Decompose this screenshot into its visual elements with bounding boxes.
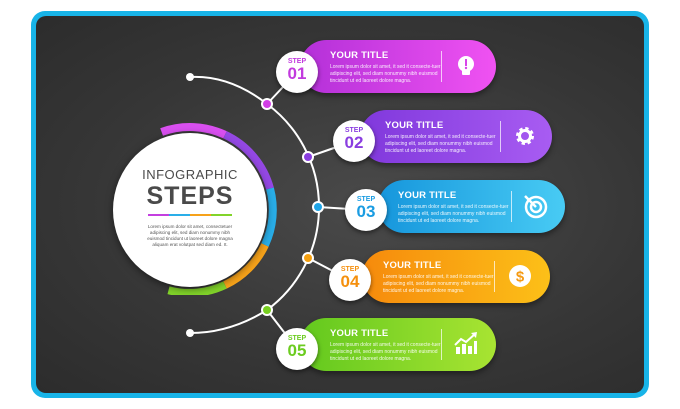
- step 01 badge: [276, 51, 318, 93]
- step 05 badge: [276, 328, 318, 370]
- pill 05: Lorem ipsum dolor sit amet, it sed it consecte-tuer adipiscing elit, sed diam nonummy nibh euismod tincidunt ut ed laoreet dolore magna.: [330, 342, 441, 362]
- pill 04: [362, 250, 550, 303]
- icon: gear: [516, 127, 534, 145]
- central circle: [111, 123, 277, 295]
- pill 03: Lorem ipsum dolor sit amet, it sed it consecte-tuer adipiscing elit, sed diam nonummy nibh euismod tincidunt ut ed laoreet dolore magna.: [398, 204, 509, 224]
- step 02 badge: 02: [345, 133, 363, 152]
- icon: dollar: [509, 265, 531, 287]
- pill 04: Lorem ipsum dolor sit amet, it sed it consecte-tuer adipiscing elit, sed diam nonummy nibh euismod tincidunt ut ed laoreet dolore magna.: [383, 274, 494, 294]
- step 04 badge: [329, 259, 371, 301]
- pill 05: YOUR TITLE: [330, 328, 388, 339]
- step 01 badge: STEP: [288, 58, 306, 65]
- pill 03: YOUR TITLE: [398, 190, 456, 201]
- icon: chart: [454, 332, 477, 354]
- step 03 badge: 03: [357, 202, 375, 221]
- step 02 badge: [333, 120, 375, 162]
- icon: dollar: $: [516, 268, 525, 286]
- step 04 badge: 04: [341, 272, 359, 291]
- step 03 badge: STEP: [357, 196, 375, 203]
- pill 04: YOUR TITLE: [383, 260, 441, 271]
- pill 02: YOUR TITLE: [385, 120, 443, 131]
- pill 02: [360, 110, 552, 163]
- step 05 badge: 05: [288, 341, 306, 360]
- pill 02: Lorem ipsum dolor sit amet, it sed it consecte-tuer adipiscing elit, sed diam nonummy nibh euismod tincidunt ut ed laoreet dolore magna.: [385, 134, 496, 154]
- pill 01: Lorem ipsum dolor sit amet, it sed it consecte-tuer adipiscing elit, sed diam nonummy nibh euismod tincidunt ut ed laoreet dolore magna.: [330, 64, 441, 84]
- step 05 badge: STEP: [288, 335, 306, 342]
- step 01 badge: 01: [288, 64, 306, 83]
- icon: target: [524, 195, 548, 218]
- step 04 badge: STEP: [341, 266, 359, 273]
- heading: Lorem ipsum dolor sit amet, consectetuer adipiscing elit, sed diam nonummy nibh euismod tincidunt ut laoreet dolore magna aliquam erat volutpat sed diam ed. It.: [147, 224, 233, 247]
- pill 01: [300, 40, 496, 93]
- heading: STEPS: [146, 182, 233, 210]
- step 02 badge: STEP: [345, 127, 363, 134]
- pill 03: [378, 180, 565, 233]
- heading: [142, 167, 238, 247]
- heading: INFOGRAPHIC: [142, 167, 238, 182]
- pill 01: YOUR TITLE: [330, 50, 388, 61]
- step 03 badge: [345, 189, 387, 231]
- icon: bulb: [458, 56, 474, 75]
- pill 05: [300, 318, 496, 371]
